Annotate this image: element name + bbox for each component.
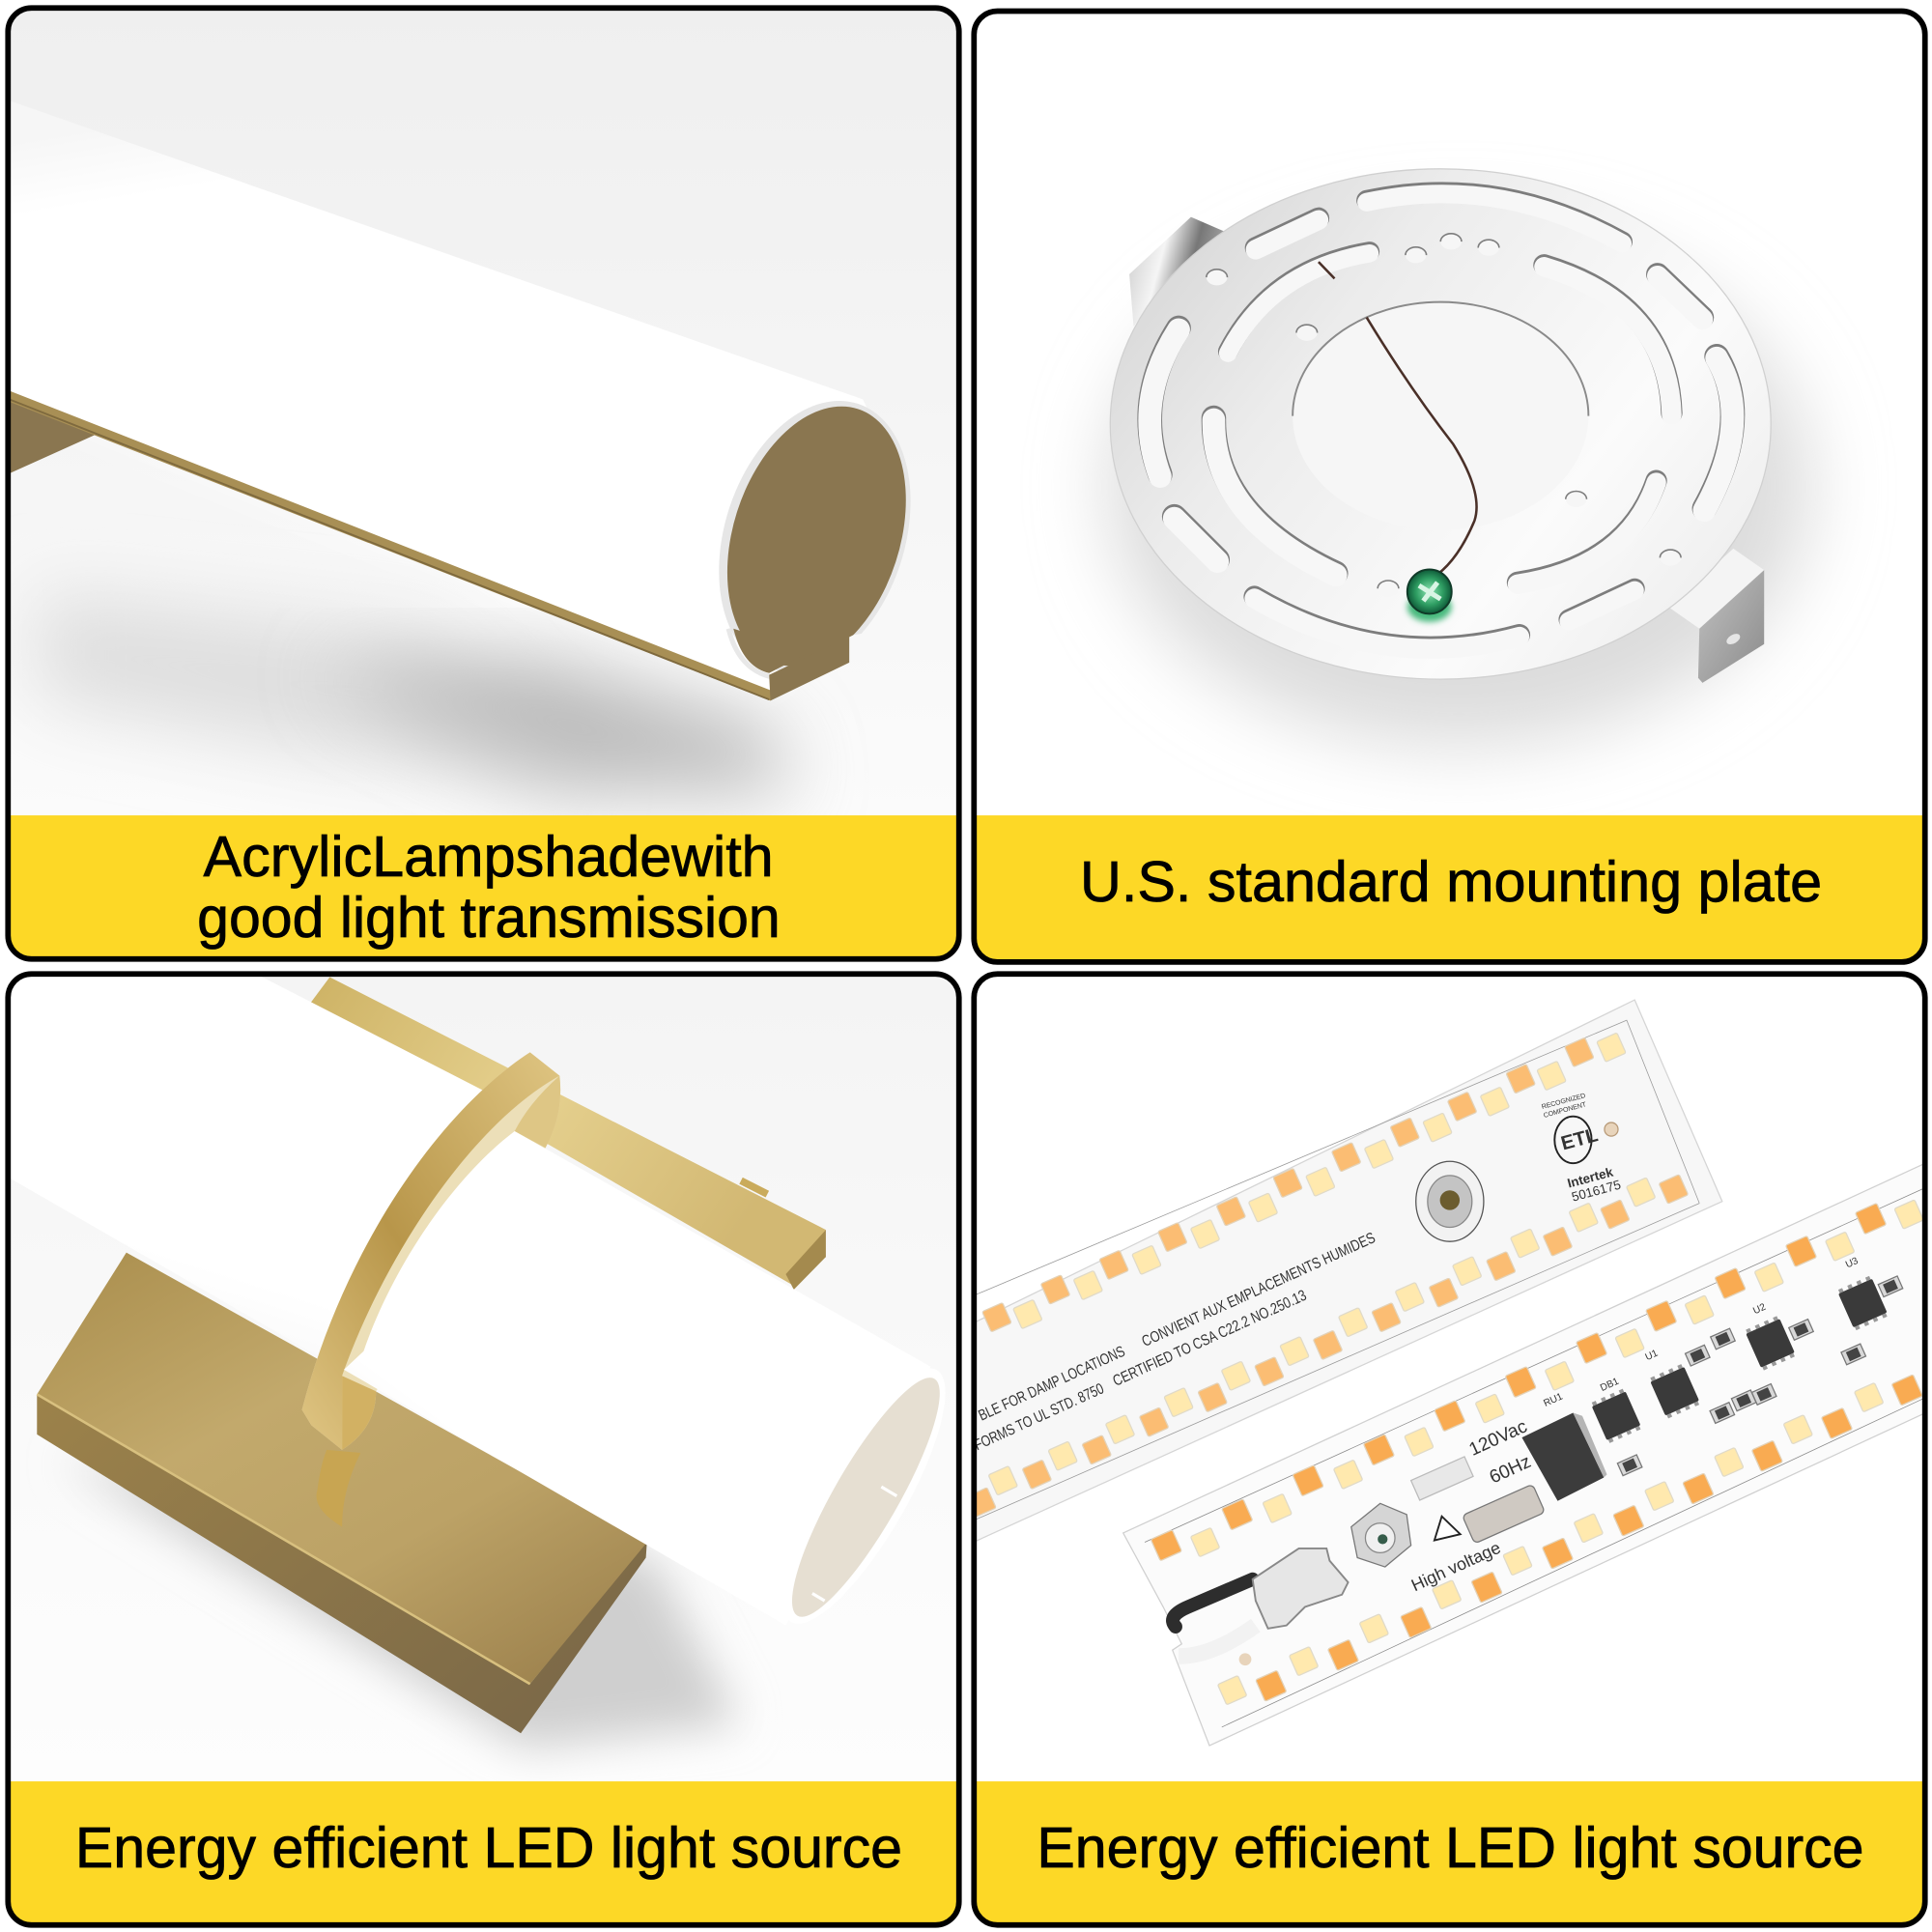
board markings	[1408, 1256, 1861, 1595]
mounting holes	[1207, 234, 1681, 597]
right tab	[1668, 549, 1764, 683]
board label text: CONVIENT AUX EMPLACEMENTS HUMIDES	[1140, 1230, 1378, 1350]
caption text: good light transmission	[197, 885, 781, 950]
caption text: Energy efficient LED light source	[75, 1815, 902, 1880]
certification mark	[1541, 1093, 1623, 1205]
green ground screw	[1407, 570, 1452, 622]
board markings: U2	[1751, 1302, 1768, 1317]
certification mark: ETL	[1559, 1124, 1601, 1154]
board markings: 120Vac	[1466, 1416, 1531, 1461]
high voltage warning icon	[1435, 1517, 1461, 1541]
board markings: DB1	[1599, 1377, 1621, 1394]
left tab	[1129, 217, 1228, 327]
LED rows	[967, 1033, 1689, 1517]
gold edge strip	[0, 387, 771, 700]
certification mark: 5016175	[1570, 1178, 1623, 1205]
plate shadow	[1108, 228, 1810, 746]
certification mark: COMPONENT	[1543, 1101, 1588, 1120]
LED rows	[1151, 1200, 1923, 1705]
board markings: 60Hz	[1487, 1452, 1534, 1488]
lower LED board	[1123, 1151, 1932, 1746]
tube right section	[344, 1131, 794, 1569]
panel: LED boards	[960, 974, 1932, 1932]
panel: mounting plate	[966, 11, 1932, 976]
chips and components	[1411, 1276, 1903, 1544]
base plate	[37, 1253, 647, 1733]
caption band	[11, 815, 956, 956]
board markings: High voltage	[1408, 1538, 1504, 1595]
tube end cap	[719, 401, 910, 701]
tube left section	[12, 978, 483, 1209]
certification mark: Intertek	[1566, 1164, 1615, 1191]
outer and inner slots	[1150, 192, 1732, 649]
back bar	[308, 977, 826, 1290]
board label text: CERTIFIED TO CSA C22.2 NO.250.13	[1111, 1288, 1309, 1390]
board markings: RU1	[1542, 1391, 1565, 1409]
caption text: AcrylicLampshadewith	[204, 824, 774, 889]
board label text: FORMS TO UL STD. 8750	[972, 1380, 1107, 1454]
certification mark: RECOGNIZED	[1541, 1093, 1586, 1111]
panel: acrylic lampshade	[0, 8, 986, 976]
tube body	[11, 146, 866, 690]
upper LED board	[960, 1000, 1722, 1548]
bracket behind tube	[11, 402, 95, 473]
ring support disc	[302, 1052, 560, 1450]
board markings: U1	[1644, 1349, 1660, 1363]
caption band	[966, 1781, 1932, 1932]
panel: sconce tube and brass base	[0, 972, 986, 1932]
board markings: U3	[1844, 1256, 1861, 1270]
tube open end	[792, 1378, 940, 1617]
mounting nut	[1416, 1161, 1484, 1241]
board label text	[972, 1230, 1378, 1454]
mounting nut	[1351, 1503, 1411, 1567]
ring reflection	[317, 1450, 360, 1527]
base shadow	[62, 1459, 740, 1748]
shadow below tube	[23, 582, 811, 815]
central hole	[1292, 301, 1590, 439]
ground wire	[1319, 262, 1477, 575]
wire connector	[1173, 1548, 1349, 1665]
plate body	[1110, 169, 1771, 679]
caption text: Energy efficient LED light source	[1037, 1815, 1864, 1880]
caption band	[977, 815, 1922, 959]
caption text: U.S. standard mounting plate	[1080, 849, 1822, 914]
caption band	[11, 1781, 956, 1922]
caption text	[197, 824, 781, 950]
board label text: BLE FOR DAMP LOCATIONS	[977, 1344, 1127, 1424]
